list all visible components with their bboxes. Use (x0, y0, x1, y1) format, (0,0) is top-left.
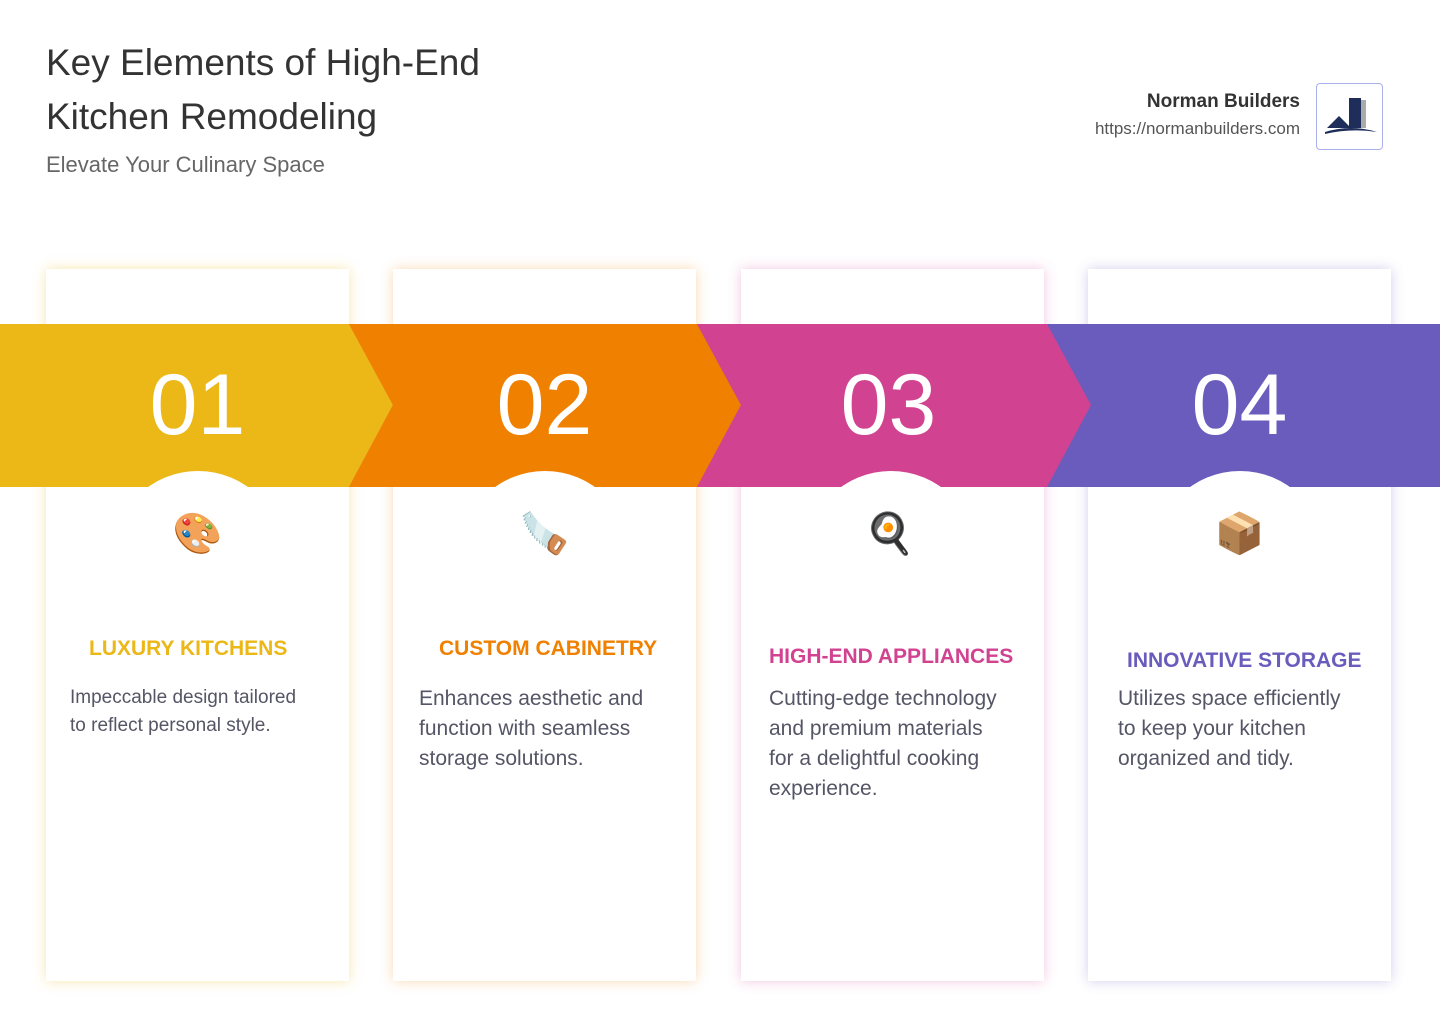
brand text: https://normanbuilders.com (1095, 119, 1300, 138)
text 3: experience. (769, 777, 878, 800)
icon: box: 📦 (1215, 511, 1264, 557)
heading 4: INNOVATIVE STORAGE (1127, 649, 1362, 672)
icon: saw: 🪚 (520, 511, 569, 557)
subtitle: Elevate Your Culinary Space (46, 152, 325, 177)
chevron band (0, 324, 1440, 487)
icon: frying pan: 🍳 (865, 511, 914, 557)
text 3: Cutting-edge technology (769, 687, 997, 710)
heading 2: CUSTOM CABINETRY (439, 637, 657, 660)
text 2: function with seamless (419, 717, 630, 740)
text: 02 (497, 357, 592, 453)
card 1 (46, 269, 349, 981)
text 3 (769, 687, 997, 800)
text 1 (70, 687, 296, 736)
card 3 (741, 269, 1044, 981)
text 3: and premium materials (769, 717, 983, 740)
brand text: Norman Builders (1147, 91, 1300, 112)
text 1: Impeccable design tailored (70, 687, 296, 708)
card 2 (393, 269, 696, 981)
text 4: Utilizes space efficiently (1118, 687, 1341, 710)
text 2: storage solutions. (419, 747, 584, 770)
text 4: organized and tidy. (1118, 747, 1294, 770)
numbers: 01 (150, 357, 245, 453)
heading 3: HIGH-END APPLIANCES (769, 645, 1013, 668)
heading 1: LUXURY KITCHENS (89, 637, 287, 660)
circles (112, 471, 284, 643)
title: Key Elements of High-End (46, 42, 480, 83)
text 2 (419, 687, 643, 770)
text 4 (1118, 687, 1341, 770)
brand text (1095, 91, 1300, 138)
text 2: Enhances aesthetic and (419, 687, 643, 710)
text 3: for a delightful cooking (769, 747, 979, 770)
title (46, 42, 480, 137)
card 4 (1088, 269, 1391, 981)
icon: palette: 🎨 (173, 511, 222, 557)
text 1: to reflect personal style. (70, 715, 271, 736)
title: Kitchen Remodeling (46, 96, 377, 137)
text: 04 (1192, 357, 1287, 453)
logo (1316, 83, 1383, 150)
text 4: to keep your kitchen (1118, 717, 1306, 740)
text: 03 (841, 357, 936, 453)
